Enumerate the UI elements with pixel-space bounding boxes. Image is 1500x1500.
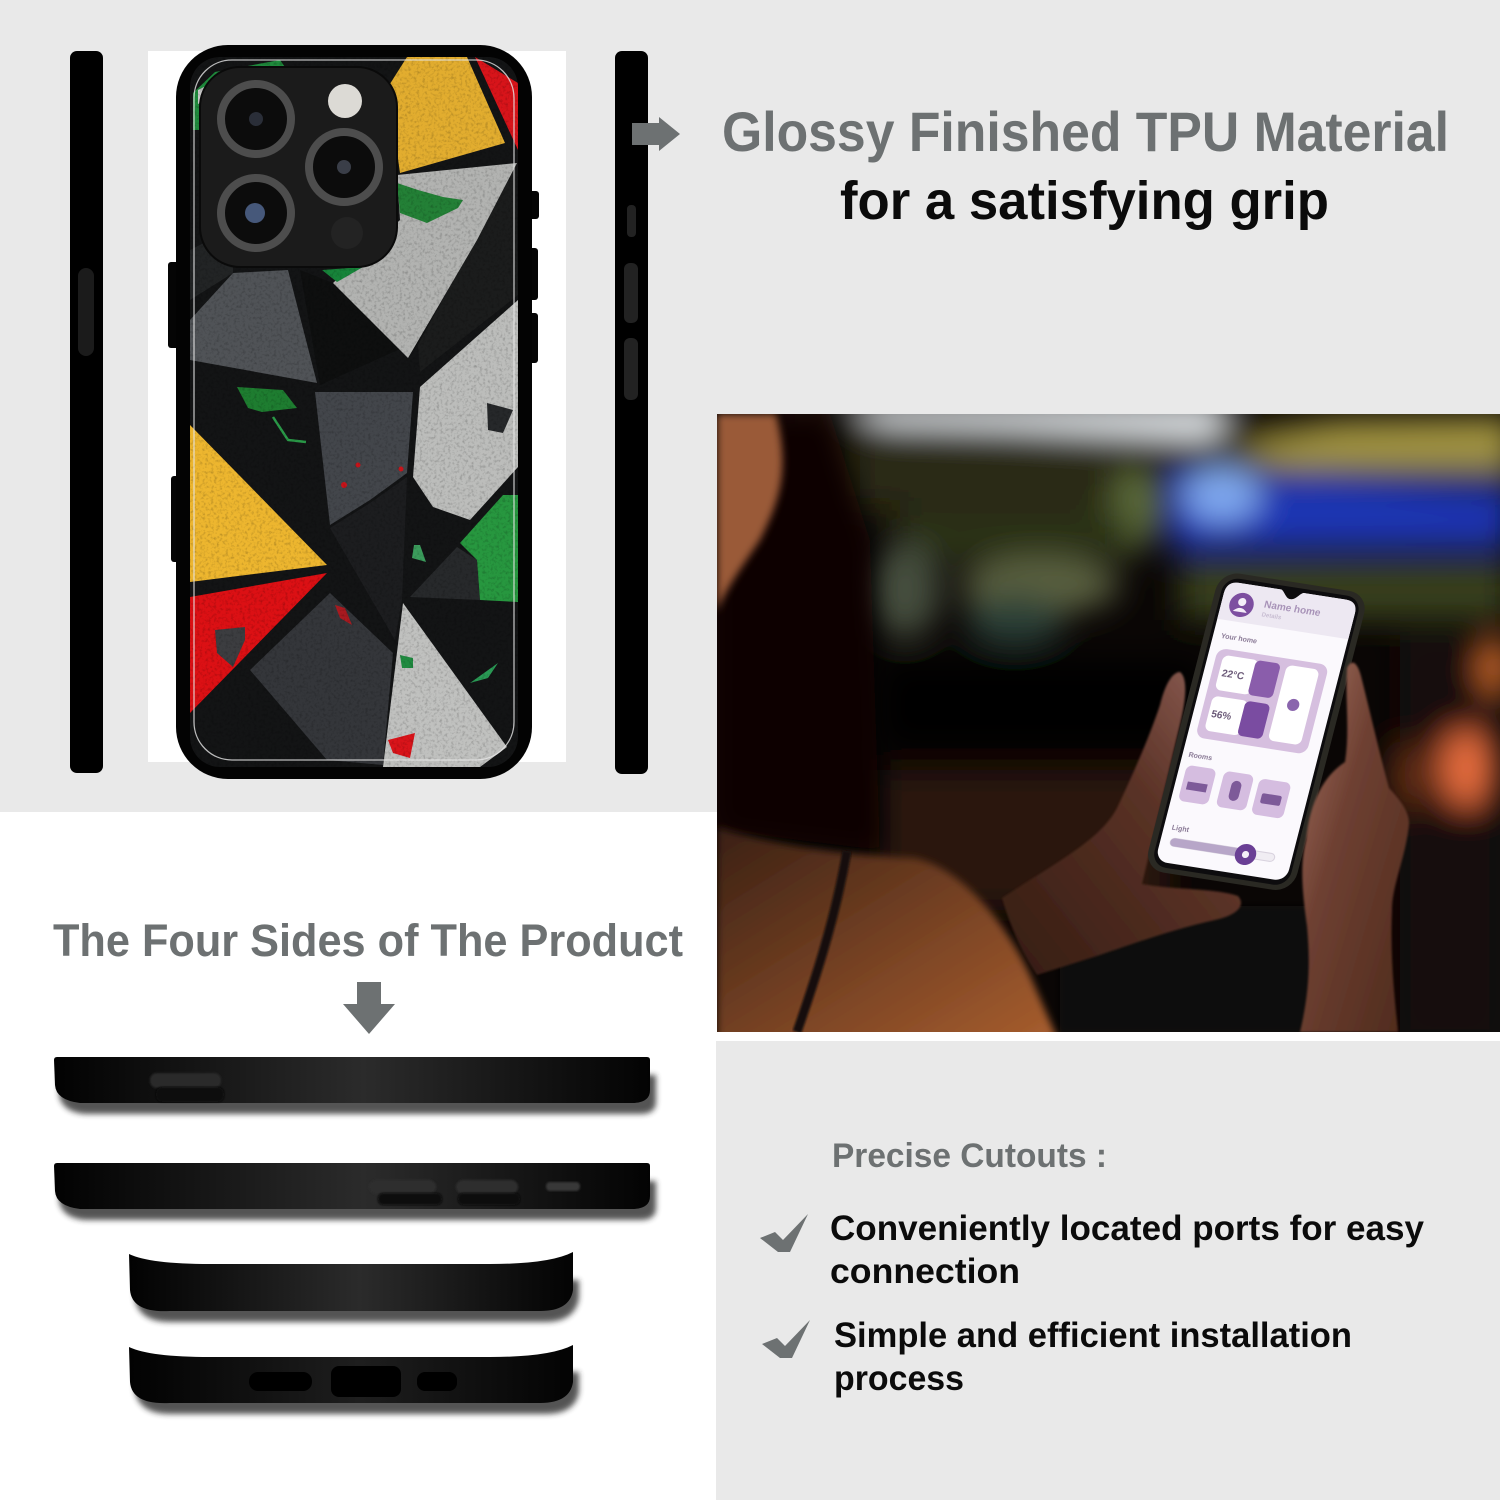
smartphone: Your home: [1220, 632, 1258, 645]
text: installation benefit: [834, 1316, 1352, 1398]
text: ports benefit: [830, 1209, 1425, 1291]
smartphone: 22°C: [1220, 668, 1246, 683]
smartphone: Light: [1171, 824, 1191, 834]
icon: check mark 1: [760, 1214, 808, 1252]
text: ports benefit: Conveniently located ports for easy: [830, 1209, 1425, 1248]
right side view of case: [615, 51, 648, 774]
arrow pointing to heading: [632, 117, 680, 151]
heading: glossy material: for a satisfying grip: [840, 171, 1329, 231]
smartphone: Name home: [1263, 600, 1322, 619]
arrow pointing down: [343, 982, 395, 1034]
dress strap: [797, 851, 847, 1032]
left hand: [1002, 672, 1241, 975]
left side view of case: [70, 51, 103, 773]
side buttons: [168, 191, 539, 562]
side strip 2: [54, 1163, 656, 1220]
heading: glossy material: [722, 100, 1449, 231]
side strip 3: [129, 1252, 579, 1322]
heading: precise cutouts: Precise Cutouts :: [832, 1137, 1107, 1175]
person face: [717, 414, 783, 612]
side strip 4: [129, 1345, 579, 1414]
smartphone: 56%: [1210, 709, 1233, 723]
side strip 1: [54, 1057, 656, 1114]
text: installation benefit: Simple and efficient installation: [834, 1316, 1352, 1355]
text: ports benefit: connection: [830, 1252, 1020, 1291]
phone case with geometric pattern: [148, 45, 566, 779]
smartphone: Rooms: [1188, 751, 1213, 762]
photo: hands holding smartphone: [717, 400, 1500, 1040]
glossy inner line: [194, 60, 514, 760]
smartphone: [1144, 571, 1369, 893]
heading: four sides: The Four Sides of The Product: [53, 915, 683, 966]
concrete speckle texture: [190, 57, 518, 767]
text: installation benefit: process: [834, 1359, 964, 1398]
camera module: [200, 67, 397, 267]
dark clothing at bottom: [1060, 906, 1320, 1032]
smartphone: Details: [1261, 611, 1283, 621]
person shoulder: [717, 827, 1058, 1040]
person hair: [770, 414, 886, 844]
right hand: [1300, 663, 1409, 1032]
icon: check mark 2: [762, 1320, 810, 1358]
heading: glossy material: Glossy Finished TPU Material: [722, 100, 1449, 163]
